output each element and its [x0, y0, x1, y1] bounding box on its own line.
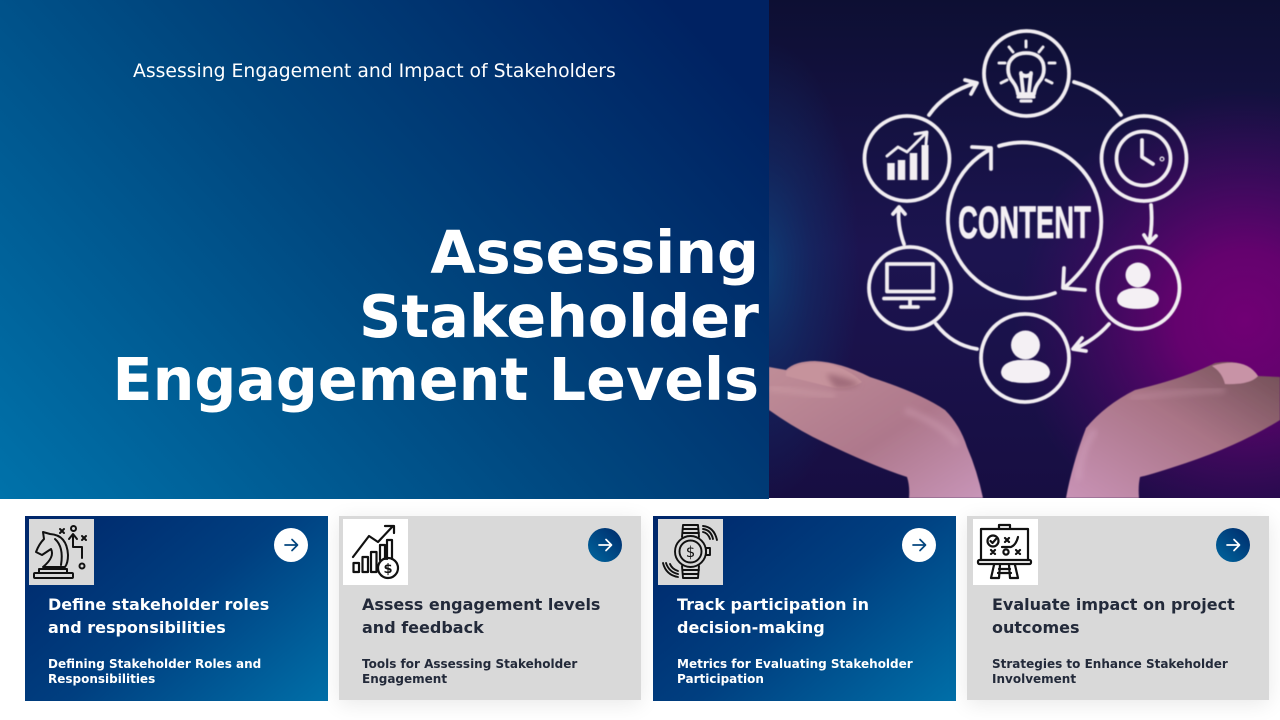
- photo: hands holding content cycle diagram: [769, 0, 1280, 498]
- card text: Strategies to Enhance Stakeholder: [992, 657, 1228, 671]
- subtitle: Assessing Engagement and Impact of Stakeholders: [133, 61, 616, 82]
- word: content: CONTENT: [958, 197, 1091, 248]
- icon: chess knight strategy: [29, 519, 94, 585]
- icon: strategy board on easel: [973, 519, 1038, 585]
- icon: bar chart with dollar: [343, 519, 408, 585]
- card text: [677, 657, 913, 686]
- card text: [48, 657, 261, 686]
- card heading: Assess engagement levels: [362, 595, 600, 614]
- card text: Participation: [677, 672, 764, 686]
- content cycle diagram: [864, 31, 1186, 402]
- card heading: outcomes: [992, 618, 1080, 637]
- icon: growth chart node: [864, 116, 950, 201]
- central ring with arrows: [948, 143, 1101, 298]
- card 3: track participation: [653, 516, 956, 701]
- card text: [362, 657, 578, 686]
- card text: [992, 657, 1228, 686]
- icon: person node right: [1098, 247, 1180, 329]
- icon: clock node: [1102, 116, 1186, 201]
- card heading: [677, 595, 869, 637]
- arrow button: [588, 528, 622, 562]
- title: Stakeholder: [359, 282, 759, 350]
- arrow button: [274, 528, 308, 562]
- card text: Involvement: [992, 672, 1076, 686]
- card heading: [48, 595, 269, 637]
- icon: light bulb node: [984, 31, 1069, 116]
- card text: Defining Stakeholder Roles and: [48, 657, 261, 671]
- title: Assessing: [430, 219, 759, 287]
- icon: smart watch with dollar: [658, 519, 723, 585]
- card heading: Evaluate impact on project: [992, 595, 1235, 614]
- card 2: assess engagement: [339, 516, 641, 700]
- card heading: and feedback: [362, 618, 484, 637]
- card heading: Track participation in: [677, 595, 869, 614]
- card text: Metrics for Evaluating Stakeholder: [677, 657, 913, 671]
- card text: Tools for Assessing Stakeholder: [362, 657, 577, 671]
- card heading: and responsibilities: [48, 618, 226, 637]
- icon: smart watch with dollar: $: [686, 543, 695, 561]
- icon: person node bottom: [981, 314, 1069, 402]
- left hero panel: [0, 0, 769, 499]
- arrow button: [902, 528, 936, 562]
- outer cycle arrows: [893, 80, 1156, 351]
- title: Engagement Levels: [113, 346, 759, 414]
- left hand: [769, 361, 983, 498]
- card heading: Define stakeholder roles: [48, 595, 269, 614]
- icon: bar chart with dollar: $: [383, 562, 393, 577]
- photo background: [769, 0, 1280, 498]
- right hand: [1066, 362, 1280, 498]
- card heading: [362, 595, 600, 637]
- card text: Engagement: [362, 672, 447, 686]
- card heading: [992, 595, 1235, 637]
- card text: Responsibilities: [48, 672, 155, 686]
- card 1: define roles: [25, 516, 328, 701]
- title: [113, 219, 759, 414]
- card heading: decision-making: [677, 618, 825, 637]
- card 4: evaluate impact: [967, 516, 1269, 700]
- icon: computer node: [869, 247, 951, 329]
- arrow button: [1216, 528, 1250, 562]
